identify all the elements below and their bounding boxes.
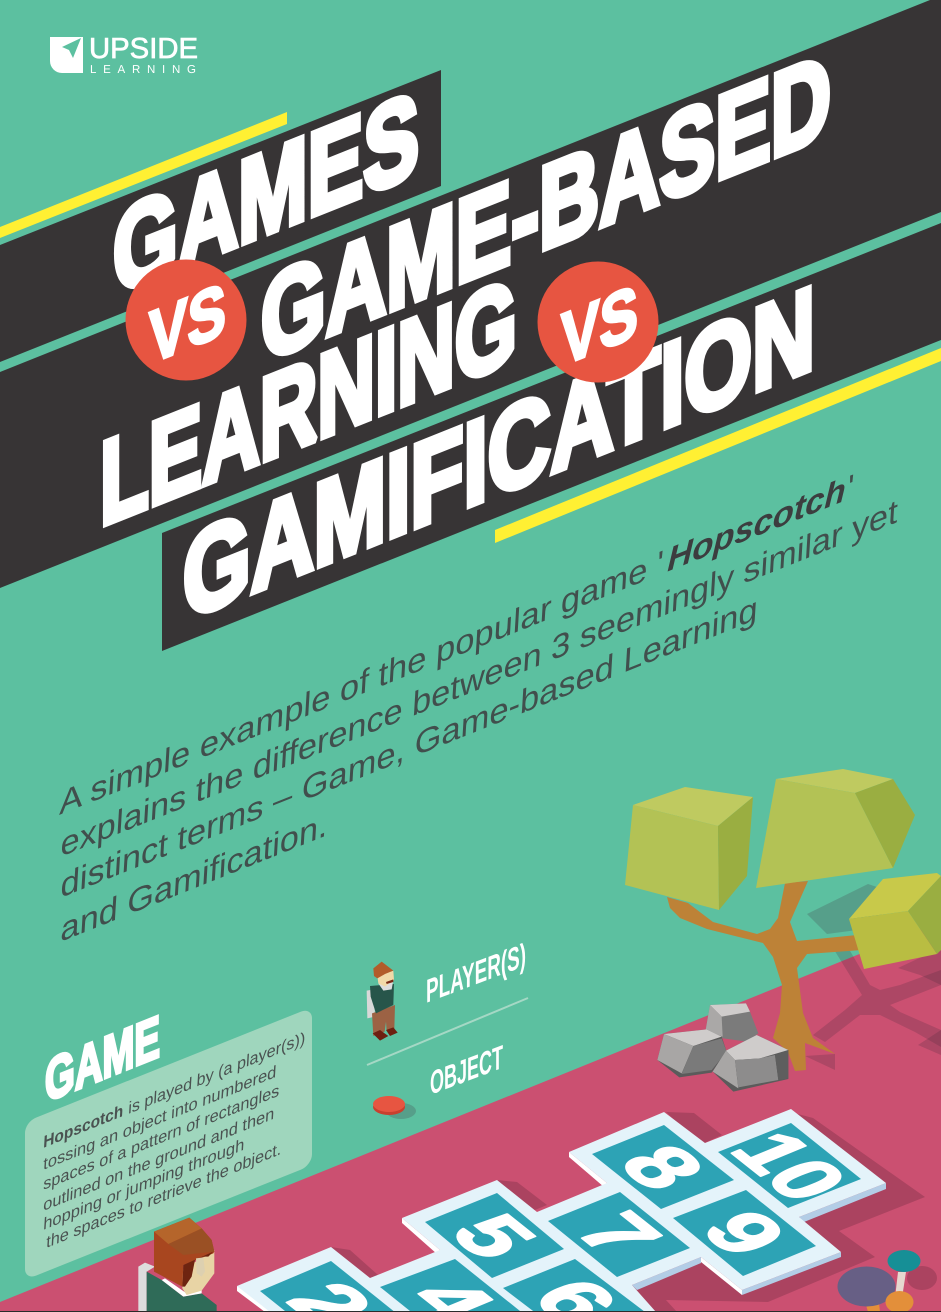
panel text: Hopscotch [43, 1101, 124, 1152]
centre canopy [756, 769, 915, 888]
court edge: white side [237, 1152, 742, 1312]
cell 7: 7 [555, 1201, 681, 1267]
cell 9 [673, 1190, 816, 1276]
cell 10: 10 [711, 1121, 868, 1212]
intro text: and Gamification. [60, 805, 329, 950]
cell 5: 5 [430, 1203, 556, 1269]
icon: player figure [367, 962, 398, 1041]
tree trunk [667, 881, 862, 1071]
logo [50, 33, 198, 76]
intro text: explains the difference between 3 seemingly similar yet [60, 492, 899, 865]
game heading: GAME [45, 1003, 160, 1115]
legend: player [367, 936, 526, 1041]
dark band: game-based learning [0, 0, 941, 588]
logo: UPSIDE [89, 33, 198, 65]
panel text [43, 1028, 306, 1252]
object label: OBJECT [430, 1038, 503, 1102]
legend: object [373, 1038, 503, 1119]
player label: PLAYER(S) [426, 935, 526, 1010]
hopscotch court [237, 1109, 886, 1312]
legend divider [367, 998, 528, 1065]
intro text: A simple example of the popular game ' [59, 543, 665, 823]
intro text: distinct terms – Game, Game-based Learning [60, 589, 759, 906]
title [100, 28, 831, 646]
mushrooms [838, 1250, 937, 1312]
cell 8 [592, 1125, 734, 1209]
pink ground [0, 921, 941, 1312]
bottom edge line [0, 1311, 941, 1312]
top yellow stripe [0, 112, 287, 238]
panel text: the spaces to retrieve the object. [46, 1139, 282, 1252]
panel text: outlined on the ground and then [43, 1104, 275, 1215]
cell 9: 9 [681, 1200, 807, 1266]
logo: LEARNING [90, 64, 196, 76]
bottom yellow stripe [495, 348, 941, 543]
panel text: hopping or jumping through [43, 1135, 245, 1234]
foreground player figure [138, 1218, 217, 1312]
panel text: tossing an object into numbered [43, 1062, 277, 1174]
hopscotch shadow [331, 1112, 925, 1312]
left canopy [625, 787, 753, 910]
tree [625, 769, 941, 1071]
game panel [25, 1007, 312, 1280]
vs badge one: VS [149, 266, 226, 380]
icon: red disc [373, 1096, 416, 1119]
title: GAMES [113, 67, 419, 321]
title: LEARNING [100, 253, 517, 552]
intro text: Hopscotch [667, 471, 847, 580]
intro text: ' [847, 467, 855, 508]
cell 8: 8 [599, 1134, 725, 1200]
tree shadow [805, 884, 941, 1070]
rocks [657, 1003, 788, 1092]
dark band: gamification [162, 223, 941, 651]
right canopy [849, 873, 941, 969]
dark band: games [0, 70, 441, 362]
court frame [237, 1109, 886, 1312]
panel text: is played by (a player(s)) [128, 1028, 306, 1118]
vs badge two: VS [561, 268, 638, 382]
cell 7 [548, 1192, 690, 1277]
panel text: spaces of a pattern of rectangles [43, 1081, 280, 1194]
court edge: blue side [632, 1183, 886, 1295]
